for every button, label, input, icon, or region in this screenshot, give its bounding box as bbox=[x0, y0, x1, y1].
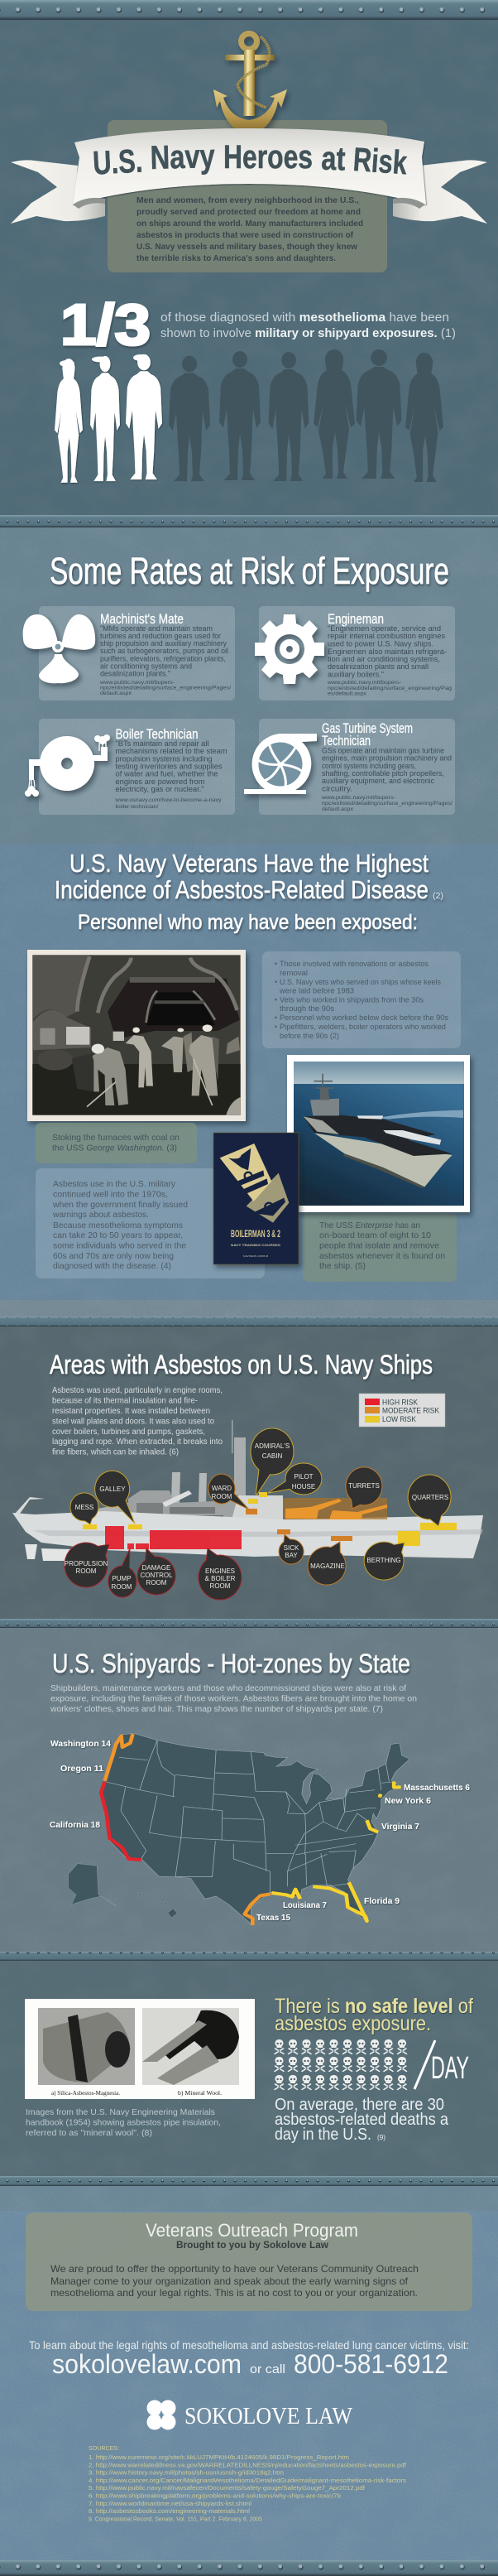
panel: bullet list of exposed personnel: • bbox=[275, 1014, 277, 1022]
paragraph: asbestos use on ships: fine fibers, which can be inhaled. (6) bbox=[52, 1447, 179, 1457]
intro paragraph: U.S. Navy vessels and military bases, though they knew bbox=[136, 243, 358, 252]
contact details: or call bbox=[250, 2362, 285, 2376]
sources list: 7. http://www.worldmaritime.net/usa-shipyards-list.shtml bbox=[89, 2500, 251, 2507]
callout labels: PUMP bbox=[112, 1575, 132, 1582]
card: Machinist's Mate: ship propulsion and auxiliary machinery bbox=[100, 638, 227, 648]
sources list: 3. http://www.history.navy.mil/photos/sh-usn/usnsh-g/id3018q2.htm bbox=[89, 2469, 284, 2476]
card: Gas Turbine System Technician: npc/enlisted/detailing/surface_engineering/Pages/ bbox=[322, 802, 453, 807]
card: Gas Turbine System Technician: www.public.navy.mil/bupers- bbox=[321, 796, 395, 801]
card: Machinist's Mate: Machinist's Mate bbox=[100, 611, 184, 627]
photo captions: a) Silica-Asbestos-Magnesia. bbox=[51, 2090, 120, 2097]
callout: admiral's cabin bbox=[251, 1428, 294, 1496]
zones: moderate risk bbox=[246, 1509, 352, 1541]
sources list: 2. http://www.warrelatedillness.va.gov/WARRELATEDILLNESS/nj/education/factsheets/asbestos-exposure.pdf bbox=[89, 2461, 407, 2469]
icon: boiler bbox=[25, 734, 110, 797]
callout labels: MAGAZINE bbox=[310, 1562, 345, 1570]
callout labels: ROOM bbox=[76, 1567, 97, 1575]
panel: veterans outreach program: We are proud to offer the opportunity to have our Veterans Community Outreach bbox=[50, 2263, 419, 2275]
callout: propulsion room bbox=[65, 1543, 109, 1587]
card: Boiler Technician: boiler-technician/ bbox=[116, 805, 159, 810]
caption: handbook bbox=[26, 2108, 221, 2138]
intro text panel bbox=[108, 120, 387, 272]
riveted band: below map bbox=[0, 1952, 498, 1961]
panel: asbestos use text: some individuals who served in the bbox=[53, 1242, 186, 1250]
callout labels: ROOM bbox=[146, 1579, 167, 1587]
card: Gas Turbine System Technician: GSs operate and maintain gas turbine bbox=[322, 745, 444, 755]
panel: veterans outreach program: Veterans Outreach Program bbox=[146, 2220, 358, 2241]
card: Boiler Technician: engines are powered from bbox=[116, 777, 205, 786]
paragraph: asbestos use on ships: because of its thermal insulation and fire- bbox=[52, 1396, 198, 1406]
card: Machinist's Mate: www.public.navy.mil/bupers- bbox=[99, 681, 175, 686]
panel: USS Enterprise caption: on-board team of eight to 10 bbox=[319, 1231, 431, 1240]
caption: handbook: Images from the U.S. Navy Engineering Materials bbox=[26, 2108, 215, 2117]
subheading: personnel: Personnel who may have been exposed: bbox=[78, 911, 418, 934]
paragraph: shipyard workers: workers' clothes, shoes and hair. This map shows the number of shipyards per state. (7) bbox=[50, 1705, 383, 1714]
intro paragraph: on ships around the world. Many manufacturers included bbox=[136, 219, 363, 229]
insignia: front chevron bbox=[220, 1144, 271, 1201]
card: Engineman: used to power U.S. Navy ships. bbox=[328, 639, 433, 648]
icon: turbine bbox=[244, 734, 317, 794]
callout: engines and boiler room bbox=[199, 1548, 242, 1600]
ship illustration bbox=[12, 1420, 483, 1561]
callout labels: PROPULSION bbox=[65, 1560, 108, 1567]
photo: Boilerman manual bbox=[213, 1133, 299, 1264]
callout labels: BAY bbox=[285, 1552, 298, 1559]
panel: asbestos use text: Because mesothelioma symptoms bbox=[53, 1221, 183, 1230]
paragraph: shipyard workers: exposure, including the families of those workers. Asbestos fibers are brought into the home on bbox=[50, 1694, 417, 1704]
icon: gold anchor bbox=[213, 31, 287, 137]
panel: bullet list of exposed personnel: before the 90s (2) bbox=[280, 1032, 339, 1040]
heading: no safe level: There is no safe level of bbox=[275, 1995, 473, 2018]
card: Boiler Technician: electricity, gas or nuclear." bbox=[116, 784, 204, 793]
callout labels: DAMAGE bbox=[142, 1564, 170, 1572]
insignia: back chevron bbox=[247, 1173, 289, 1223]
panel: bullet list of exposed personnel: Vets who worked in shipyards from the 30s bbox=[280, 995, 424, 1004]
sources list bbox=[89, 2444, 407, 2522]
ribbon banner with title bbox=[11, 128, 487, 224]
card: Machinist's Mate: such as turbogenerators, pumps and oil bbox=[100, 646, 228, 655]
card: Engineman: auxiliary boilers." bbox=[328, 669, 384, 679]
panel: veterans outreach program bbox=[26, 2212, 472, 2311]
icon: gear bbox=[255, 614, 324, 684]
callout: ward room bbox=[208, 1474, 249, 1509]
ribbon centre band bbox=[73, 128, 426, 205]
per day mark: DAY bbox=[431, 2051, 469, 2086]
heading: no safe level bbox=[275, 1995, 473, 2035]
sources list: 4. http://www.cancer.org/Cancer/MalignantMesothelioma/DetailedGuide/malignant-mesothelioma-risk-factors bbox=[89, 2477, 406, 2484]
stat: 1/3: 1/3 bbox=[60, 292, 151, 357]
text: deaths per day bbox=[275, 2096, 449, 2144]
callouts: moderate risk orange bbox=[208, 1467, 382, 1585]
heading: shipyards: U.S. Shipyards - Hot-zones by State bbox=[52, 1649, 410, 1678]
panel: bullet list of exposed personnel bbox=[262, 951, 461, 1048]
panel: veterans outreach program: mesothelioma and your legal rights. This is at no cost to you or your organization. bbox=[50, 2287, 418, 2299]
card: Gas Turbine System Technician: shafting, controllable pitch propellers, bbox=[322, 768, 444, 778]
photo: Boilerman manual: NAVY TRAINING COURSES bbox=[231, 1244, 281, 1247]
callout labels: BERTHING bbox=[366, 1557, 401, 1564]
callout: mess bbox=[70, 1493, 98, 1524]
panel: USS Enterprise caption: The USS Enterprise has an bbox=[319, 1221, 420, 1230]
panel: bullet list of exposed personnel: removal bbox=[280, 969, 308, 977]
intro paragraph: asbestos in products that were used in construction of bbox=[136, 231, 354, 240]
card: Gas Turbine System Technician: engines, main propulsion machinery and bbox=[322, 754, 452, 762]
pictogram: six civilian figures bbox=[169, 349, 443, 482]
per day mark bbox=[414, 2040, 469, 2089]
map labels: California 18 bbox=[50, 1820, 100, 1830]
paragraph: asbestos use on ships: cover boilers, turbines and pumps, gaskets, bbox=[52, 1428, 205, 1437]
callouts: low risk gold bbox=[70, 1428, 451, 1580]
card: Boiler Technician: testing inventories and supplies bbox=[116, 762, 223, 770]
panel: USS Enterprise caption: asbestos whenever it is found on bbox=[319, 1252, 445, 1261]
card: Boiler Technician: "BTs maintain and repair all bbox=[116, 739, 208, 748]
card: Machinist's Mate: purifiers, elevators, refrigeration plants, bbox=[100, 654, 226, 662]
map: Hawaii bbox=[138, 1893, 177, 1918]
riveted band: below intro bbox=[0, 515, 498, 527]
panel: caption stoking: the USS George Washington. (3) bbox=[52, 1144, 177, 1153]
map labels: Texas 15 bbox=[256, 1913, 290, 1923]
callout labels: SICK bbox=[284, 1544, 299, 1552]
paragraph: asbestos use on ships: Asbestos was used, particularly in engine rooms, bbox=[52, 1386, 223, 1395]
callout labels: TURRETS bbox=[348, 1482, 380, 1490]
card: Boiler Technician: www.usnavy.com/how-to-become-a-navy bbox=[114, 798, 222, 803]
map: state borders bbox=[105, 1741, 395, 1892]
callout labels: WARD bbox=[212, 1485, 232, 1492]
callout labels bbox=[65, 1442, 448, 1591]
logo: Sokolove Law: SOKOLOVE LAW bbox=[184, 2403, 353, 2429]
title: U.S. bbox=[92, 142, 143, 182]
callout: pump room bbox=[108, 1548, 136, 1597]
callout: berthing bbox=[364, 1542, 405, 1580]
card: Gas Turbine System Technician: Technician bbox=[322, 733, 371, 749]
intro paragraph: proudly served and protected our freedom at home and bbox=[136, 208, 361, 217]
sources list: 6. http://www.shipbreakingplatform.org/problems-and-solutions/why-ships-are-toxic/7b bbox=[89, 2492, 341, 2499]
callout: turrets bbox=[346, 1467, 382, 1509]
panel: asbestos use text: 60s and 70s are only now being bbox=[53, 1252, 174, 1261]
card: Gas Turbine System Technician: auxiliary equipment, and electronic bbox=[322, 776, 434, 785]
card: Machinist's Mate: desalinization plants." bbox=[100, 669, 170, 677]
map: United States bbox=[69, 1733, 409, 1925]
card: Engineman: Engineman bbox=[328, 611, 384, 627]
panel: asbestos use text bbox=[36, 1168, 265, 1278]
zone: turrets bbox=[283, 1498, 387, 1519]
pictogram: three military figures out of nine bbox=[55, 354, 162, 483]
card: Engineman: tion and air conditioning systems, bbox=[328, 654, 440, 663]
card: Machinist's Mate: default.aspx bbox=[100, 691, 132, 696]
riveted band: above footer bbox=[0, 2176, 498, 2186]
title bbox=[92, 138, 409, 182]
panel: caption stoking: Stoking the furnaces with coal on bbox=[52, 1134, 180, 1143]
panel: bullet list of exposed personnel: • bbox=[275, 1023, 277, 1031]
title: Risk bbox=[352, 142, 409, 181]
heading: no safe level: asbestos exposure. bbox=[275, 2012, 431, 2035]
card: Boiler Technician: of water and fuel, whether the bbox=[116, 768, 218, 778]
paragraph: asbestos use on ships: lagging and rope. When extracted, it breaks into bbox=[52, 1437, 223, 1447]
photo: stoking furnaces bbox=[27, 950, 246, 1121]
paragraph: shipyard workers bbox=[50, 1684, 417, 1714]
ship superstructure bbox=[15, 1420, 283, 1522]
card: Boiler Technician: mechanisms related to the steam bbox=[116, 746, 227, 755]
stoker figures bbox=[93, 1033, 240, 1105]
photo: pipe insulation handbook bbox=[25, 1999, 255, 2099]
card: Machinist's Mate: "MMs operate and maintain steam bbox=[100, 624, 213, 633]
callout: magazine bbox=[308, 1542, 346, 1585]
intro paragraph bbox=[136, 196, 363, 263]
callout labels: GALLEY bbox=[99, 1485, 126, 1493]
callout: pilot house bbox=[268, 1463, 322, 1495]
paragraph: shipyard workers: Shipbuilders, maintenance workers and those who decommissioned ships were also at risk of bbox=[50, 1684, 406, 1693]
card: Engineman: Enginemen also maintain refrigera- bbox=[328, 647, 447, 656]
panel: veterans outreach program: Manager come to your organization and speak about the early warning signs of bbox=[50, 2275, 409, 2287]
ribbon folds bbox=[73, 198, 425, 209]
stoker caps bbox=[92, 1024, 213, 1054]
legend: risk levels: MODERATE RISK bbox=[382, 1406, 440, 1414]
text: deaths per day: day in the U.S. bbox=[275, 2126, 371, 2144]
callout: damage control room bbox=[137, 1548, 175, 1595]
zones: high risk bbox=[105, 1526, 242, 1549]
card: Engineman: "Enginemen operate, service and bbox=[328, 624, 441, 633]
call to action line: To learn about the legal rights of mesothelioma and asbestos-related lung cancer victims, visit: bbox=[29, 2338, 469, 2352]
legend: risk levels bbox=[359, 1394, 445, 1427]
map labels: Oregon 11 bbox=[60, 1764, 103, 1774]
panel: USS Enterprise caption: the ship. (5) bbox=[319, 1262, 366, 1271]
card: Gas Turbine System Technician: Gas Turbine System bbox=[322, 720, 413, 736]
card: Machinist's Mate bbox=[39, 606, 235, 701]
contact details bbox=[52, 2349, 448, 2379]
card: Engineman: es/default.aspx bbox=[328, 692, 366, 697]
title: Heroes bbox=[223, 139, 313, 176]
riveted band: ship section top bbox=[0, 1317, 498, 1327]
contact details: 800-581-6912 bbox=[294, 2349, 448, 2379]
riveted band: map section top bbox=[0, 1619, 498, 1628]
map labels: Washington 14 bbox=[50, 1739, 111, 1749]
callout labels: ENGINES bbox=[205, 1567, 235, 1575]
caption: handbook: referred to as "mineral wool". (8) bbox=[26, 2129, 152, 2138]
panel: bullet list of exposed personnel: were laid before 1983 bbox=[279, 987, 354, 995]
riveted band: top bbox=[0, 0, 498, 20]
photo: aircraft carrier bbox=[287, 1055, 470, 1212]
heading: highest incidence bbox=[55, 849, 443, 904]
callout labels: ROOM bbox=[210, 1582, 231, 1590]
title: at bbox=[321, 141, 346, 178]
panel: bullet list of exposed personnel: Pipefitters, welders, boiler operators who worked bbox=[280, 1023, 446, 1031]
map labels: Florida 9 bbox=[364, 1896, 400, 1906]
panel: asbestos use text: Asbestos use in the U.S. military bbox=[53, 1180, 176, 1189]
callouts: high risk red bbox=[65, 1543, 242, 1600]
photo: Boilerman manual: NAVPERS 10535-B bbox=[243, 1254, 268, 1258]
map labels bbox=[50, 1739, 470, 1923]
panel: veterans outreach program: Brought to you by Sokolove Law bbox=[176, 2241, 328, 2251]
panel: bullet list of exposed personnel: • bbox=[275, 960, 277, 968]
paragraph: asbestos use on ships bbox=[52, 1386, 223, 1457]
riveted band: bottom bbox=[0, 2560, 498, 2576]
callout labels: CONTROL bbox=[140, 1572, 173, 1579]
panel: bullet list of exposed personnel: U.S. Navy vets who served on ships whose keels bbox=[280, 978, 442, 986]
callout labels: ROOM bbox=[212, 1493, 232, 1500]
sources list: 1. http://www.curemeso.org/site/c.kkLUJ7MPKtH/b.4124605/k.98D1/Progress_Report.htm bbox=[89, 2453, 349, 2461]
panel: bullet list of exposed personnel: • bbox=[275, 995, 277, 1004]
icons: thirty skulls bbox=[274, 2039, 407, 2090]
panel: bullet list of exposed personnel: Those involved with renovations or asbestos bbox=[280, 960, 429, 968]
text: deaths per day: asbestos-related deaths a bbox=[275, 2111, 449, 2129]
card: Gas Turbine System Technician: default.aspx bbox=[322, 807, 353, 812]
panel: caption stoking bbox=[36, 1123, 197, 1163]
card: Gas Turbine System Technician: control systems including gears, bbox=[322, 761, 416, 770]
heading: highest incidence: (2) bbox=[433, 892, 443, 901]
sources list: 9. Congressional Record, Senate, Vol. 151, Part 2. February 8, 2005 bbox=[89, 2516, 262, 2522]
panel: USS Enterprise caption: people that isolate and remove bbox=[319, 1242, 439, 1250]
card: Engineman: repair internal combustion engines bbox=[328, 631, 445, 640]
card: Engineman: desalinization plants and small bbox=[328, 662, 429, 671]
map labels: Louisiana 7 bbox=[283, 1900, 327, 1910]
sources list: 5. http://www.public.navy.mil/navsafecen/Documents/safety-gouge/SafetyGouge7_Apr2012.pdf bbox=[89, 2484, 366, 2492]
book title: BOILERMAN 3 & 2 bbox=[231, 1230, 280, 1240]
callout labels: HOUSE bbox=[292, 1483, 315, 1490]
panel: bullet list of exposed personnel: through the 90s bbox=[280, 1004, 335, 1013]
callout: quarters bbox=[408, 1475, 451, 1526]
photo: pipe insulation handbook: b) Mineral Wool. bbox=[178, 2090, 222, 2097]
map labels: New York 6 bbox=[385, 1796, 431, 1806]
sources list: 8. http://asbestosbooks.com/engineering-materials.html bbox=[89, 2507, 250, 2515]
contact details: sokolovelaw.com bbox=[52, 2349, 242, 2379]
card: Engineman: www.public.navy.mil/bupers- bbox=[327, 681, 401, 686]
callout labels: MESS bbox=[75, 1504, 93, 1511]
callout labels: CABIN bbox=[262, 1452, 282, 1460]
ribbon tail right bbox=[393, 160, 487, 224]
callout labels: & BOILER bbox=[205, 1575, 236, 1582]
map: contiguous states bbox=[100, 1733, 409, 1924]
card: Boiler Technician bbox=[39, 719, 235, 815]
sources list: SOURCES: bbox=[89, 2444, 119, 2452]
card: Machinist's Mate: npc/enlisted/detailing/surface_engineering/Pages/ bbox=[100, 686, 231, 691]
map labels: Virginia 7 bbox=[381, 1822, 419, 1832]
map: highlighted coasts bbox=[101, 1734, 401, 1925]
callout labels: QUARTERS bbox=[412, 1494, 448, 1501]
card: Gas Turbine System Technician bbox=[259, 719, 455, 815]
stat sentence: shown to involve military or shipyard exposures. (1) bbox=[160, 326, 456, 340]
card: Machinist's Mate: air conditioning systems and bbox=[100, 661, 192, 671]
card: Boiler Technician: propulsion systems including bbox=[116, 754, 212, 763]
stat sentence: of those diagnosed with mesothelioma have been bbox=[160, 311, 449, 325]
paragraph: asbestos use on ships: resistant properties. It was installed between bbox=[52, 1407, 210, 1416]
panel: asbestos use text: when the government finally issued bbox=[52, 1201, 188, 1210]
intro paragraph: Men and women, from every neighborhood in the U.S., bbox=[136, 196, 359, 205]
zones: low risk bbox=[83, 1492, 457, 1546]
card: Gas Turbine System Technician: circuitry. bbox=[322, 783, 352, 793]
text: deaths per day: On average, there are 30 bbox=[275, 2096, 444, 2114]
heading: highest incidence: U.S. Navy Veterans Have the Highest bbox=[69, 849, 429, 878]
caption: handbook: handbook (1954) showing asbestos pipe insulation, bbox=[26, 2118, 221, 2128]
callout labels: PILOT bbox=[294, 1473, 314, 1481]
icon: propeller bbox=[23, 614, 95, 683]
heading: highest incidence: Incidence of Asbestos-Related Disease bbox=[55, 875, 429, 904]
panel: bullet list of exposed personnel: • bbox=[275, 978, 277, 986]
panel: asbestos use text: can take 20 to 50 years to appear, bbox=[53, 1231, 183, 1240]
logo: Sokolove Law bbox=[147, 2400, 353, 2429]
map: Alaska bbox=[69, 1864, 116, 1906]
ribbon tail left bbox=[11, 160, 105, 224]
text: deaths per day: (9) bbox=[377, 2134, 385, 2141]
callout: sick bay bbox=[279, 1534, 304, 1564]
card: Engineman: npc/enlisted/detailing/surface_engineering/Pag bbox=[328, 686, 452, 691]
card: Machinist's Mate: turbines and reduction gears used for bbox=[100, 631, 221, 640]
callout labels: ADMIRAL'S bbox=[255, 1442, 290, 1450]
card: Boiler Technician: Boiler Technician bbox=[116, 726, 199, 742]
legend: risk levels: HIGH RISK bbox=[382, 1398, 419, 1406]
panel: bullet list of exposed personnel: Personnel who worked below deck before the 90s bbox=[280, 1014, 449, 1022]
panel: asbestos use text: warnings about asbestos. bbox=[52, 1211, 149, 1220]
intro paragraph: the terrible risks to America's sons and daughters. bbox=[136, 254, 336, 263]
map labels: Massachusetts 6 bbox=[404, 1783, 470, 1793]
title: Navy bbox=[150, 138, 216, 176]
panel: USS Enterprise caption bbox=[303, 1213, 457, 1282]
ship hull bbox=[12, 1511, 483, 1558]
stat sentence bbox=[160, 311, 456, 340]
card: Engineman bbox=[259, 606, 455, 701]
panel: asbestos use text: diagnosed with the disease. (4) bbox=[53, 1262, 171, 1271]
callout: galley bbox=[95, 1471, 135, 1524]
panel: asbestos use text: continued well into the 1970s, bbox=[53, 1191, 168, 1199]
callout labels: ROOM bbox=[112, 1583, 132, 1591]
paragraph: asbestos use on ships: steel wall plates and doors. It was also used to bbox=[52, 1418, 214, 1426]
legend: risk levels: LOW RISK bbox=[382, 1415, 417, 1423]
